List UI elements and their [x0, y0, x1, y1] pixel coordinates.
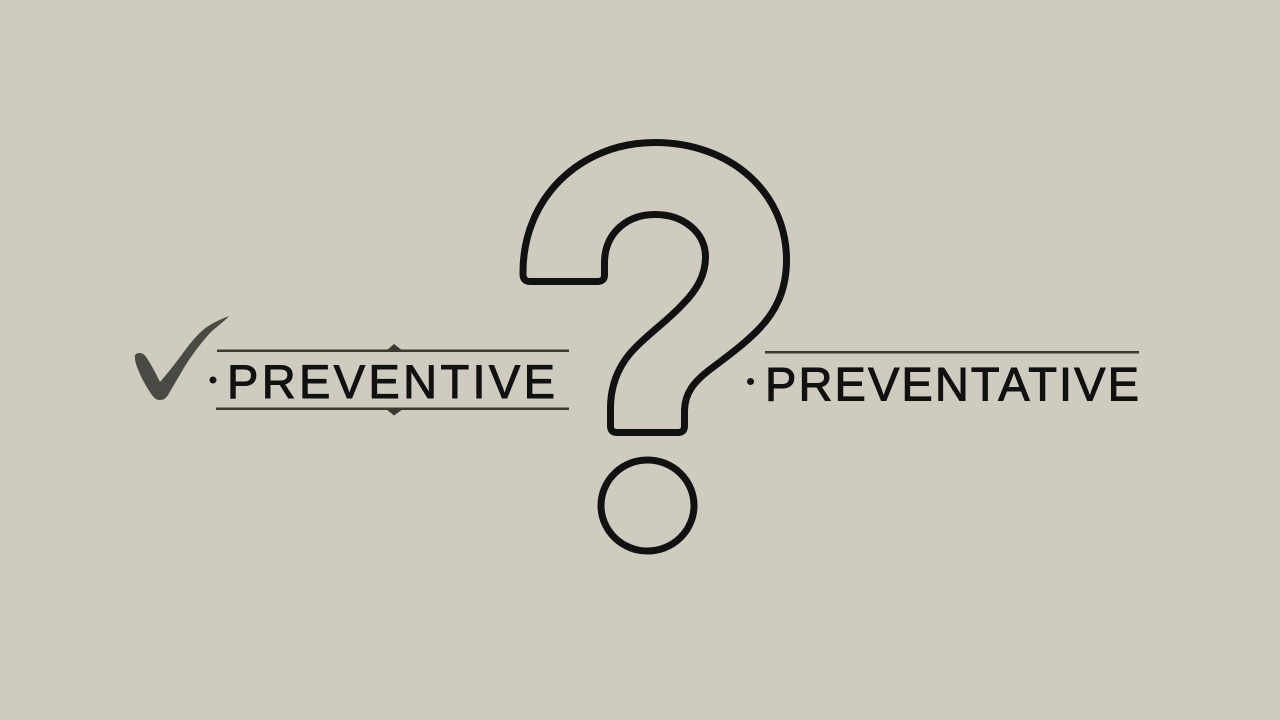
- bottom rule with ornament: [216, 408, 569, 416]
- bullet dot: [747, 378, 754, 385]
- icon: question mark: [523, 142, 786, 551]
- bullet dot: [210, 376, 216, 384]
- word: preventive: PREVENTIVE: [227, 355, 555, 408]
- icon: check mark: [135, 316, 229, 400]
- word: preventative: PREVENTATIVE: [765, 358, 1139, 410]
- top rule with ornament: [217, 344, 569, 352]
- label: preventive: [210, 344, 569, 416]
- icon: question mark dot: [601, 460, 694, 551]
- label: preventative: [747, 351, 1139, 410]
- top rule: [765, 351, 1139, 354]
